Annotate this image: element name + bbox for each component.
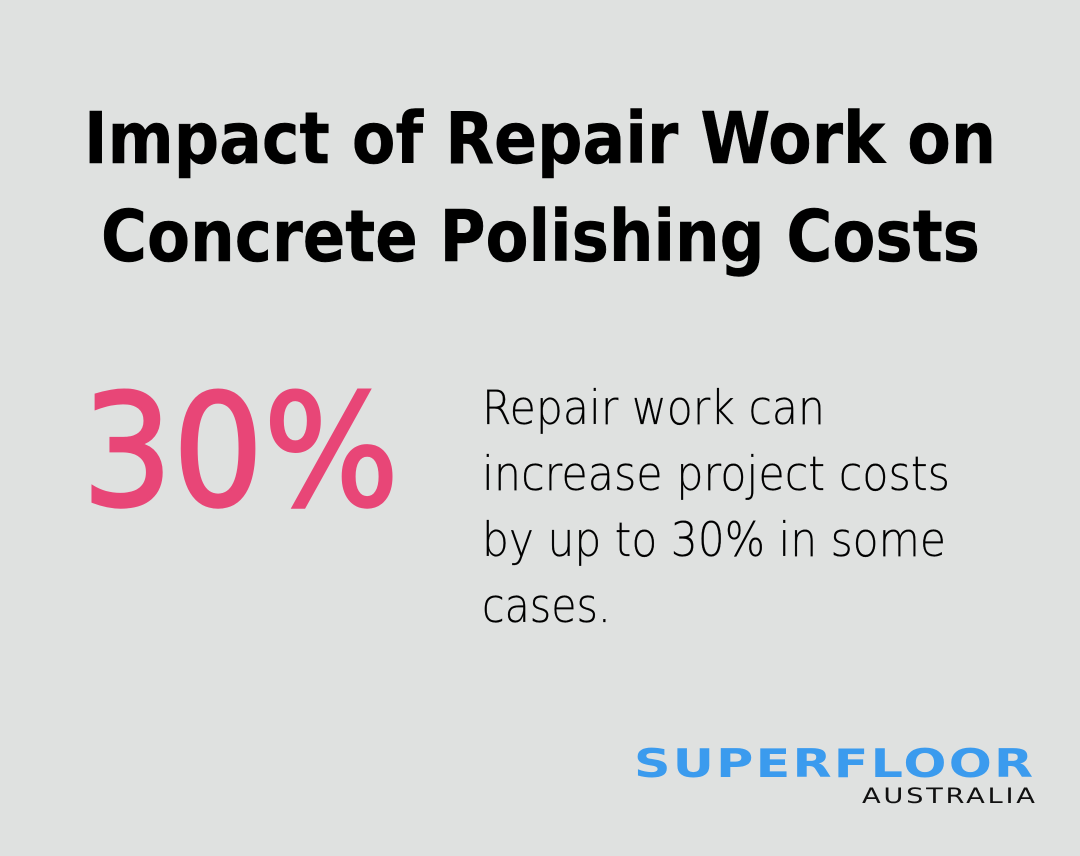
- description text: [482, 381, 950, 634]
- description text: Repair work can: [482, 381, 825, 436]
- big statistic: 30%: 30%: [82, 361, 399, 542]
- title: Impact of Repair Work on: [84, 97, 996, 180]
- title: [84, 97, 996, 278]
- title: Concrete Polishing Costs: [101, 195, 980, 278]
- logo: Superfloor Australia: [634, 741, 1035, 808]
- description text: increase project costs: [482, 447, 950, 502]
- logo: Superfloor Australia: SUPERFLOOR: [634, 741, 1033, 786]
- description text: cases.: [482, 579, 611, 634]
- description text: by up to 30% in some: [482, 513, 946, 568]
- logo: Superfloor Australia: AUSTRALIA: [862, 783, 1035, 808]
